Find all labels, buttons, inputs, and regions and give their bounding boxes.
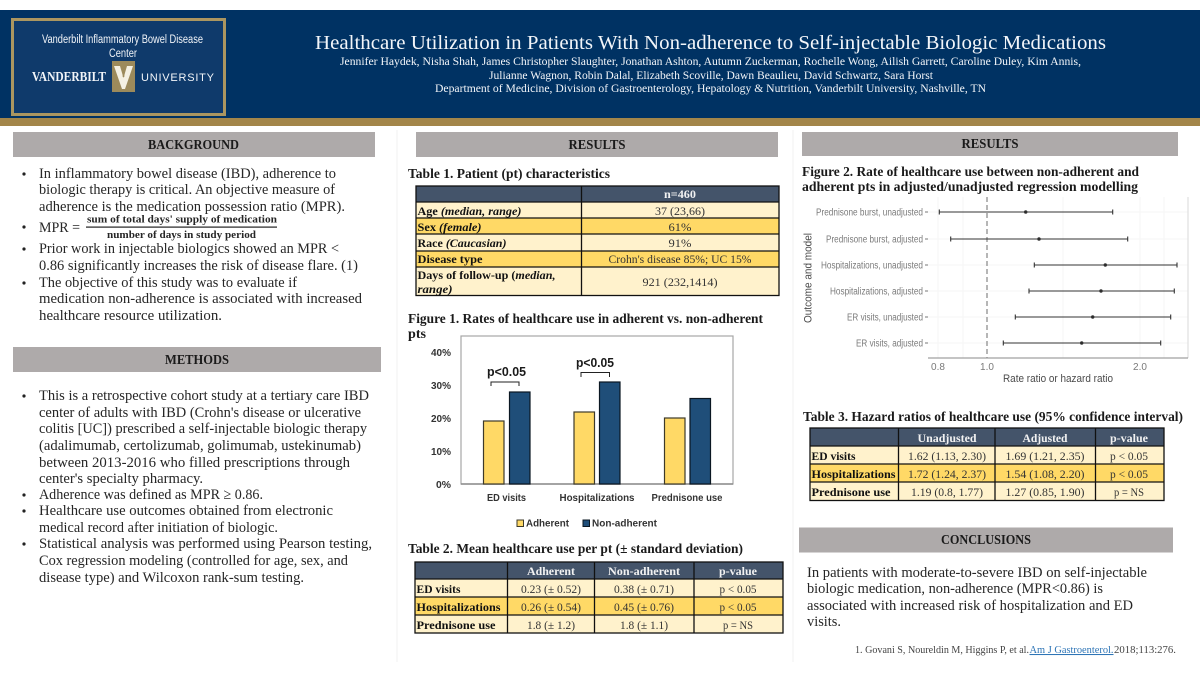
reference citation: Am J Gastroenterol. (1030, 645, 1114, 656)
methods bullets: (adalimumab, certolizumab, golimumab, ustekinumab) (39, 438, 361, 454)
background bullets: 0.86 significantly increases the risk of disease flare. (1) (39, 258, 358, 274)
table 2: mean healthcare use: 1.8 (± 1.2) (527, 618, 575, 632)
axis tick labels: 2.0 (1133, 362, 1147, 373)
bars: adherent (484, 412, 685, 484)
category labels: ED visits (487, 492, 526, 504)
table 3: hazard ratios: 1.19 (0.8, 1.77) (911, 485, 983, 499)
table 3: hazard ratios: ED visits (812, 449, 856, 463)
conclusions text (807, 565, 1147, 630)
table 3: hazard ratios: p-value (1110, 431, 1149, 445)
heading: background: BACKGROUND (148, 138, 239, 153)
table 1: patient characteristics: 61% (668, 220, 692, 234)
figure 1 heading (408, 312, 763, 342)
background bullets (22, 166, 362, 324)
background bullets: Prior work in injectable biologics showed an MPR < (39, 241, 339, 257)
background bullets: In inflammatory bowel disease (IBD), adherence to (39, 166, 336, 182)
heading: results, middle column (416, 132, 778, 157)
table 2: mean healthcare use: 1.8 (± 1.1) (620, 618, 668, 632)
table 2: mean healthcare use: ED visits (416, 582, 461, 596)
heading: conclusions: CONCLUSIONS (941, 533, 1031, 548)
table 2: mean healthcare use: p < 0.05 (720, 582, 756, 596)
figure 1 heading: pts (408, 327, 427, 342)
y axis labels: 0% (436, 479, 452, 491)
table 2: mean healthcare use: p < 0.05 (720, 600, 756, 614)
table 3: hazard ratios: p = NS (1114, 485, 1144, 499)
y axis labels: 10% (431, 446, 452, 458)
legend (517, 518, 657, 530)
table 2: mean healthcare use: 0.26 (± 0.54) (521, 600, 581, 614)
row labels: ER visits, adjusted (856, 338, 923, 350)
table 1: patient characteristics (416, 186, 779, 296)
heading: results, right column: RESULTS (962, 137, 1019, 152)
axis tick labels: 1.0 (980, 362, 994, 373)
row labels: Prednisone burst, adjusted (826, 234, 923, 246)
category labels: Prednisone use (652, 492, 723, 504)
background bullets: The objective of this study was to evaluate if (39, 275, 297, 291)
row labels (816, 208, 928, 350)
methods bullets: between 2013-2016 who filled prescriptions through (39, 455, 350, 471)
methods bullets: center of adults with IBD (Crohn's disease or ulcerative (39, 405, 361, 421)
heading: methods: METHODS (165, 353, 229, 368)
table 2: mean healthcare use (415, 562, 783, 633)
table 3: hazard ratios: Prednisone use (812, 485, 891, 499)
significance bracket: hospitalizations (576, 356, 614, 377)
table 3: hazard ratios: 1.62 (1.13, 2.30) (908, 449, 986, 463)
figure 2 heading (802, 165, 1139, 195)
y axis labels: 20% (431, 413, 452, 425)
category labels: Hospitalizations (560, 492, 635, 504)
table 2: mean healthcare use: 0.45 (± 0.76) (614, 600, 674, 614)
table 3: hazard ratios: p < 0.05 (1110, 449, 1148, 463)
background bullets: adherence is the medication possession ratio (MPR). (39, 199, 345, 215)
y axis title: Outcome and model (802, 233, 814, 323)
conclusions text: associated with increased risk of hospitalization and ED (807, 598, 1133, 614)
table 3: hazard ratios (810, 428, 1164, 500)
bars: non-adherent (510, 382, 710, 484)
table 2: mean healthcare use: Adherent (527, 564, 575, 578)
logo box: Vanderbilt IBD Center: Center (109, 48, 137, 60)
header banner (0, 10, 1200, 126)
logo box: Vanderbilt IBD Center: Vanderbilt Inflammatory Bowel Disease (42, 34, 203, 46)
logo box: Vanderbilt IBD Center: VANDERBILT (32, 70, 107, 85)
x axis title: Rate ratio or hazard ratio (1003, 373, 1113, 385)
conclusions text: biologic medication, non-adherence (MPR<0.86) is (807, 581, 1103, 597)
conclusions text: visits. (807, 614, 841, 630)
axis tick labels: 0.8 (931, 362, 945, 373)
background bullets: biologic therapy is critical. An objective measure of (39, 182, 335, 198)
table 2: mean healthcare use: 0.23 (± 0.52) (521, 582, 581, 596)
methods bullets: This is a retrospective cohort study at a tertiary care IBD (39, 388, 369, 404)
row labels: Hospitalizations, adjusted (830, 286, 923, 298)
methods bullets: colitis [UC]) prescribed a self-injectable biologic therapy (39, 421, 367, 437)
table 2: mean healthcare use: 0.38 (± 0.71) (614, 582, 674, 596)
table 3 heading: Table 3. Hazard ratios of healthcare use (95% confidence interval) (803, 410, 1183, 425)
forest plot: rate ratios (802, 197, 1188, 385)
heading: conclusions (799, 528, 1173, 552)
conclusions text: In patients with moderate-to-severe IBD on self-injectable (807, 565, 1147, 581)
methods bullets: Cox regression modeling (controlled for age, sex, and (39, 553, 348, 569)
logo box: Vanderbilt IBD Center (12, 20, 224, 114)
panel: conclusions (799, 528, 1173, 630)
axis tick labels (931, 362, 1147, 373)
table 3: hazard ratios: 1.54 (1.08, 2.20) (1006, 467, 1084, 481)
intervals (939, 210, 1177, 346)
methods bullets (22, 388, 372, 586)
table 3: hazard ratios: p < 0.05 (1110, 467, 1148, 481)
logo box: Vanderbilt IBD Center: UNIVERSITY (141, 72, 215, 84)
background bullets: number of days in study period (107, 230, 256, 241)
authors and affiliation (340, 54, 1081, 95)
figure 2 heading: adherent pts in adjusted/unadjusted regression modelling (802, 180, 1138, 195)
table 1: patient characteristics: Age (median, range) (418, 204, 522, 218)
category labels (487, 492, 723, 504)
table 1: patient characteristics: 37 (23,66) (655, 204, 705, 218)
table 3: hazard ratios: 1.27 (0.85, 1.90) (1006, 485, 1084, 499)
methods bullets: disease type) and Wilcoxon rank-sum testing. (39, 570, 304, 586)
methods bullets: Statistical analysis was performed using Pearson testing, (39, 536, 372, 552)
row labels: Hospitalizations, unadjusted (821, 260, 923, 272)
table 2: mean healthcare use: p-value (719, 564, 758, 578)
table 1: patient characteristics: n=460 (664, 187, 696, 201)
y axis labels: 40% (431, 347, 452, 359)
heading: methods (13, 347, 381, 372)
table 2 heading: Table 2. Mean healthcare use per pt (± standard deviation) (408, 542, 743, 557)
table 1: patient characteristics: Race (Caucasian) (418, 236, 506, 250)
table 3: hazard ratios: 1.72 (1.24, 2.37) (908, 467, 986, 481)
heading: results, middle column: RESULTS (568, 138, 626, 153)
methods bullets: Adherence was defined as MPR ≥ 0.86. (39, 487, 263, 503)
legend: Adherent (526, 518, 569, 530)
panel: methods (13, 347, 381, 586)
background bullets: MPR = (39, 220, 80, 236)
table 2: mean healthcare use: Non-adherent (608, 564, 680, 578)
reference citation (855, 645, 1176, 656)
y axis labels: 30% (431, 380, 452, 392)
y axis labels (431, 347, 452, 491)
methods bullets: center's specialty pharmacy. (39, 471, 203, 487)
table 1: patient characteristics: 921 (232,1414) (642, 275, 718, 289)
table 2: mean healthcare use: Prednisone use (416, 618, 496, 632)
table 1: patient characteristics: Disease type (418, 252, 483, 266)
panel: background (13, 132, 375, 324)
table 1: patient characteristics: 91% (668, 236, 692, 250)
background bullets: sum of total days' supply of medication (87, 214, 277, 226)
legend: Non-adherent (592, 518, 657, 530)
table 3: hazard ratios: Adjusted (1022, 431, 1068, 445)
authors and affiliation: Julianne Wagnon, Robin Dalal, Elizabeth Scoville, Dawn Beaulieu, David Schwartz, Sara Horst (489, 68, 934, 82)
heading: background (13, 132, 375, 157)
table 3: hazard ratios: 1.69 (1.21, 2.35) (1006, 449, 1084, 463)
authors and affiliation: Department of Medicine, Division of Gastroenterology, Hepatology & Nutrition, Vanderbilt University, Nashville, TN (435, 81, 986, 95)
methods bullets: medical record after initiation of biologic. (39, 520, 278, 536)
background bullets: medication non-adherence is associated with increased (39, 291, 362, 307)
significance bracket: ED visits: p<0.05 (487, 365, 526, 379)
table 3: hazard ratios: Hospitalizations (812, 467, 896, 481)
heading: results, right column (802, 132, 1178, 156)
background bullets: healthcare resource utilization. (39, 308, 222, 324)
figure 1 heading: Figure 1. Rates of healthcare use in adherent vs. non-adherent (408, 312, 763, 327)
row labels: Prednisone burst, unadjusted (816, 208, 923, 218)
authors and affiliation: Jennifer Haydek, Nisha Shah, James Christopher Slaughter, Jonathan Ashton, Autumn Zuckerman, Rochelle Wong, Ailish Garrett, Caroline Duley, Kim Annis, (340, 54, 1081, 68)
reference citation: 2018;113:276. (1114, 645, 1176, 656)
significance bracket: ED visits (487, 365, 526, 386)
table 3: hazard ratios: Unadjusted (918, 431, 977, 445)
table 1: patient characteristics: range) (418, 282, 452, 296)
reference citation: 1. Govani S, Noureldin M, Higgins P, et al. (855, 645, 1029, 656)
row labels: ER visits, unadjusted (847, 312, 923, 324)
table 1 heading: Table 1. Patient (pt) characteristics (408, 167, 611, 182)
table 2: mean healthcare use: p = NS (723, 618, 753, 632)
table 2: mean healthcare use: Hospitalizations (416, 600, 501, 614)
title: Healthcare Utilization in Patients With Non-adherence to Self-injectable Biologic Medications (315, 32, 1106, 54)
figure 2 heading: Figure 2. Rate of healthcare use between non-adherent and (802, 165, 1139, 180)
bar chart: rates of healthcare use (431, 336, 733, 530)
table 1: patient characteristics: Crohn's disease 85%; UC 15% (608, 252, 752, 266)
significance bracket: hospitalizations: p<0.05 (576, 356, 614, 370)
table 1: patient characteristics: Days of follow-up (median, (418, 268, 556, 282)
table 1: patient characteristics: Sex (female) (418, 220, 482, 234)
methods bullets: Healthcare use outcomes obtained from electronic (39, 503, 333, 519)
